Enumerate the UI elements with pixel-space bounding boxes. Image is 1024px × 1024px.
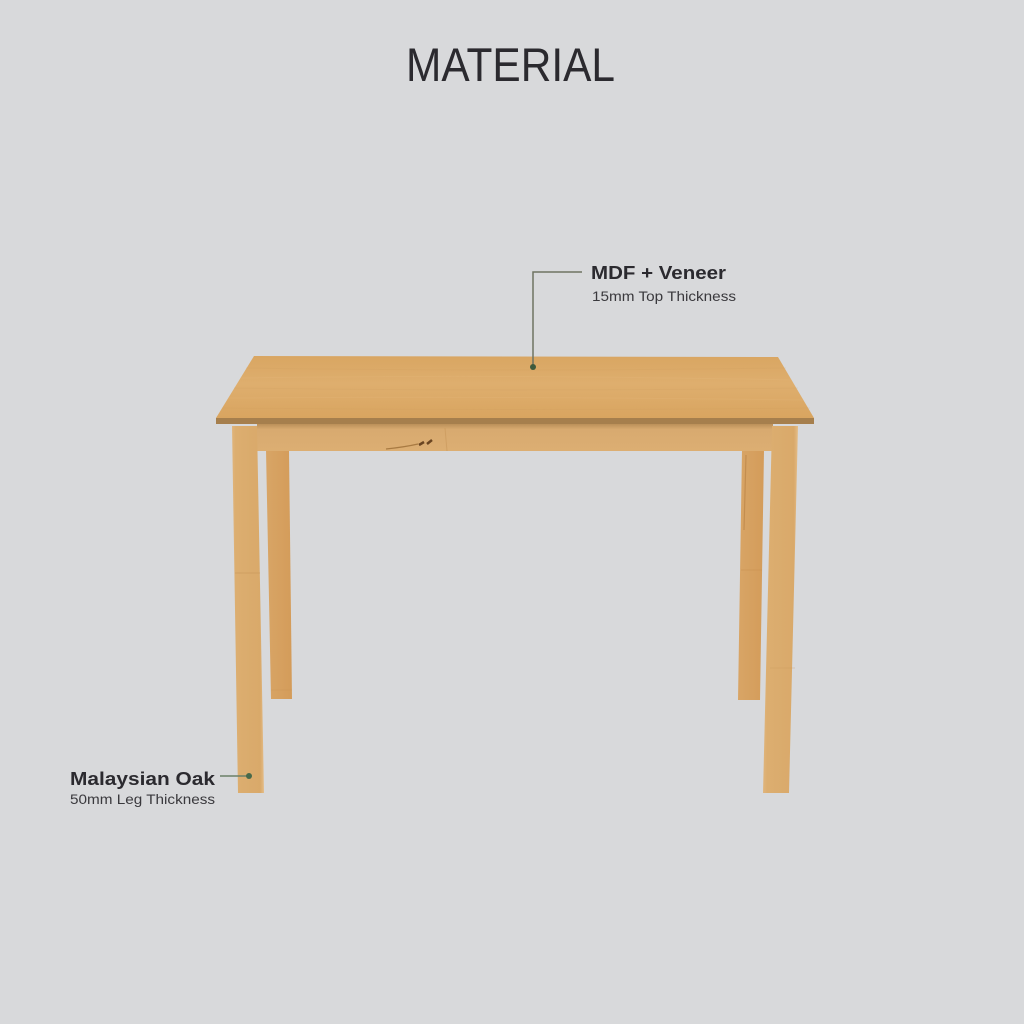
callout detail: 50mm Leg Thickness (70, 792, 215, 807)
leader dot (246, 773, 252, 779)
title: MATERIAL (406, 38, 615, 91)
table top surface (216, 356, 814, 418)
front left leg (232, 426, 264, 793)
apron rail (257, 424, 773, 451)
callout heading: Malaysian Oak (70, 769, 216, 789)
callout: MDF + Veneer (530, 263, 736, 370)
illustration: wooden table (216, 356, 814, 793)
leader dot (530, 364, 536, 370)
leader line (220, 775, 249, 777)
front right leg (763, 426, 798, 793)
callout heading: MDF + Veneer (591, 263, 726, 283)
table top edge (216, 418, 814, 424)
callout detail: 15mm Top Thickness (592, 289, 736, 304)
table top wood grain (222, 368, 810, 410)
back left leg (266, 450, 292, 699)
back right leg (738, 450, 764, 700)
callout: Malaysian Oak (70, 769, 252, 807)
leader line (533, 272, 582, 367)
